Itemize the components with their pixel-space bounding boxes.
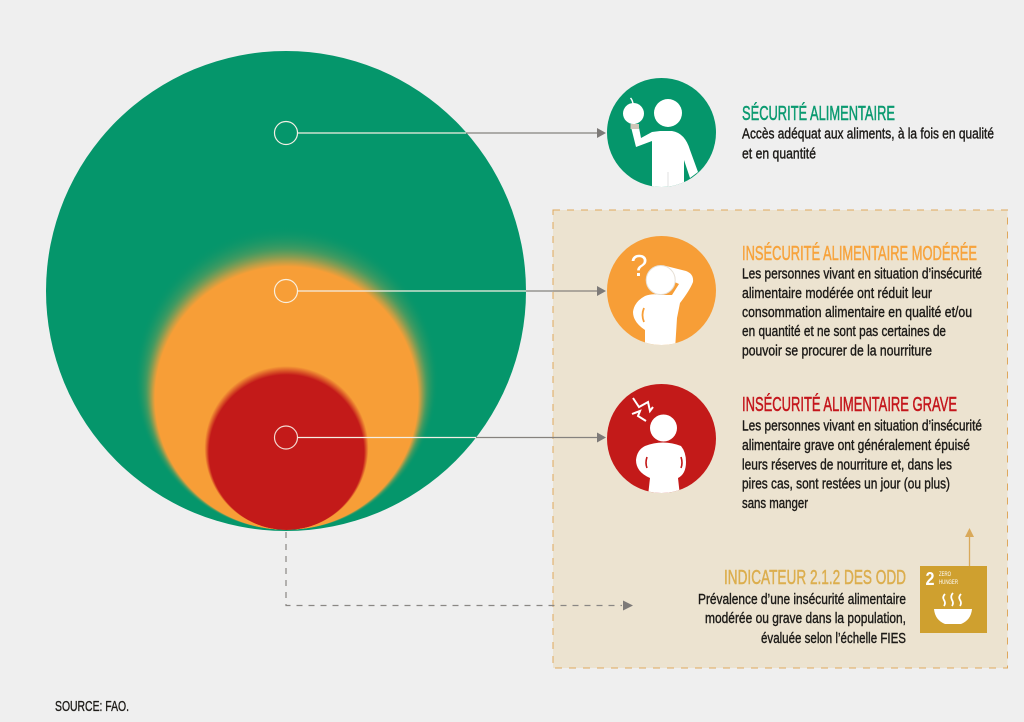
arrow: SDG up bbox=[965, 528, 974, 566]
icon: SDG 2 zero hunger: 2 bbox=[926, 569, 934, 589]
text: severe insecurity bbox=[742, 393, 982, 512]
text: SDG indicator bbox=[698, 567, 906, 647]
circle: severe food insecurity bbox=[204, 366, 368, 530]
circle: food security bbox=[46, 51, 526, 531]
connector: severe insecurity bbox=[274, 426, 606, 449]
chart: nested circles bbox=[46, 51, 526, 531]
body: SDG indicator bbox=[698, 592, 906, 647]
body: SDG indicator: modérée ou grave dans la population, bbox=[705, 611, 906, 627]
source note: SOURCE: FAO. bbox=[55, 698, 129, 715]
body: severe insecurity: alimentaire grave ont généralement épuisé bbox=[742, 438, 970, 454]
body: severe insecurity: pires cas, sont restées un jour (ou plus) bbox=[742, 476, 950, 492]
icon: SDG 2 zero hunger: HUNGER bbox=[939, 579, 958, 586]
body: food security: et en quantité bbox=[742, 146, 816, 162]
panel: insecurity background bbox=[553, 210, 1008, 668]
connector: food security bbox=[274, 122, 606, 144]
heading: SDG indicator: INDICATEUR 2.1.2 DES ODD bbox=[724, 567, 906, 589]
body: moderate insecurity bbox=[742, 266, 982, 360]
body: SDG indicator: évaluée selon l’échelle FIES bbox=[761, 631, 906, 647]
text: food security bbox=[742, 102, 994, 162]
icon: person in hunger bbox=[607, 384, 716, 496]
body: moderate insecurity: consommation alimentaire en qualité et/ou bbox=[742, 305, 972, 321]
circle: moderate food insecurity bbox=[134, 226, 438, 530]
body: moderate insecurity: en quantité et ne sont pas certaines de bbox=[742, 324, 946, 340]
body: moderate insecurity: alimentaire modérée ont réduit leur bbox=[742, 286, 932, 302]
text: moderate insecurity bbox=[742, 242, 982, 360]
heading: food security: SÉCURITÉ ALIMENTAIRE bbox=[742, 102, 895, 125]
body: severe insecurity: leurs réserves de nourriture et, dans les bbox=[742, 458, 952, 474]
icon: person wondering: ? bbox=[630, 248, 648, 283]
connector: dashed to indicator bbox=[286, 532, 633, 610]
icon: person with apple bbox=[607, 78, 716, 192]
body: SDG indicator: Prévalence d’une insécurité alimentaire bbox=[698, 592, 906, 608]
body: moderate insecurity: pouvoir se procurer de la nourriture bbox=[742, 344, 932, 360]
icon: SDG 2 zero hunger bbox=[920, 566, 987, 633]
icon: person wondering bbox=[607, 236, 716, 350]
body: food security bbox=[742, 126, 994, 162]
connector: moderate insecurity bbox=[274, 280, 606, 302]
body: severe insecurity bbox=[742, 418, 982, 512]
icon: SDG 2 zero hunger: ZERO bbox=[939, 571, 951, 578]
body: severe insecurity: sans manger bbox=[742, 496, 808, 512]
